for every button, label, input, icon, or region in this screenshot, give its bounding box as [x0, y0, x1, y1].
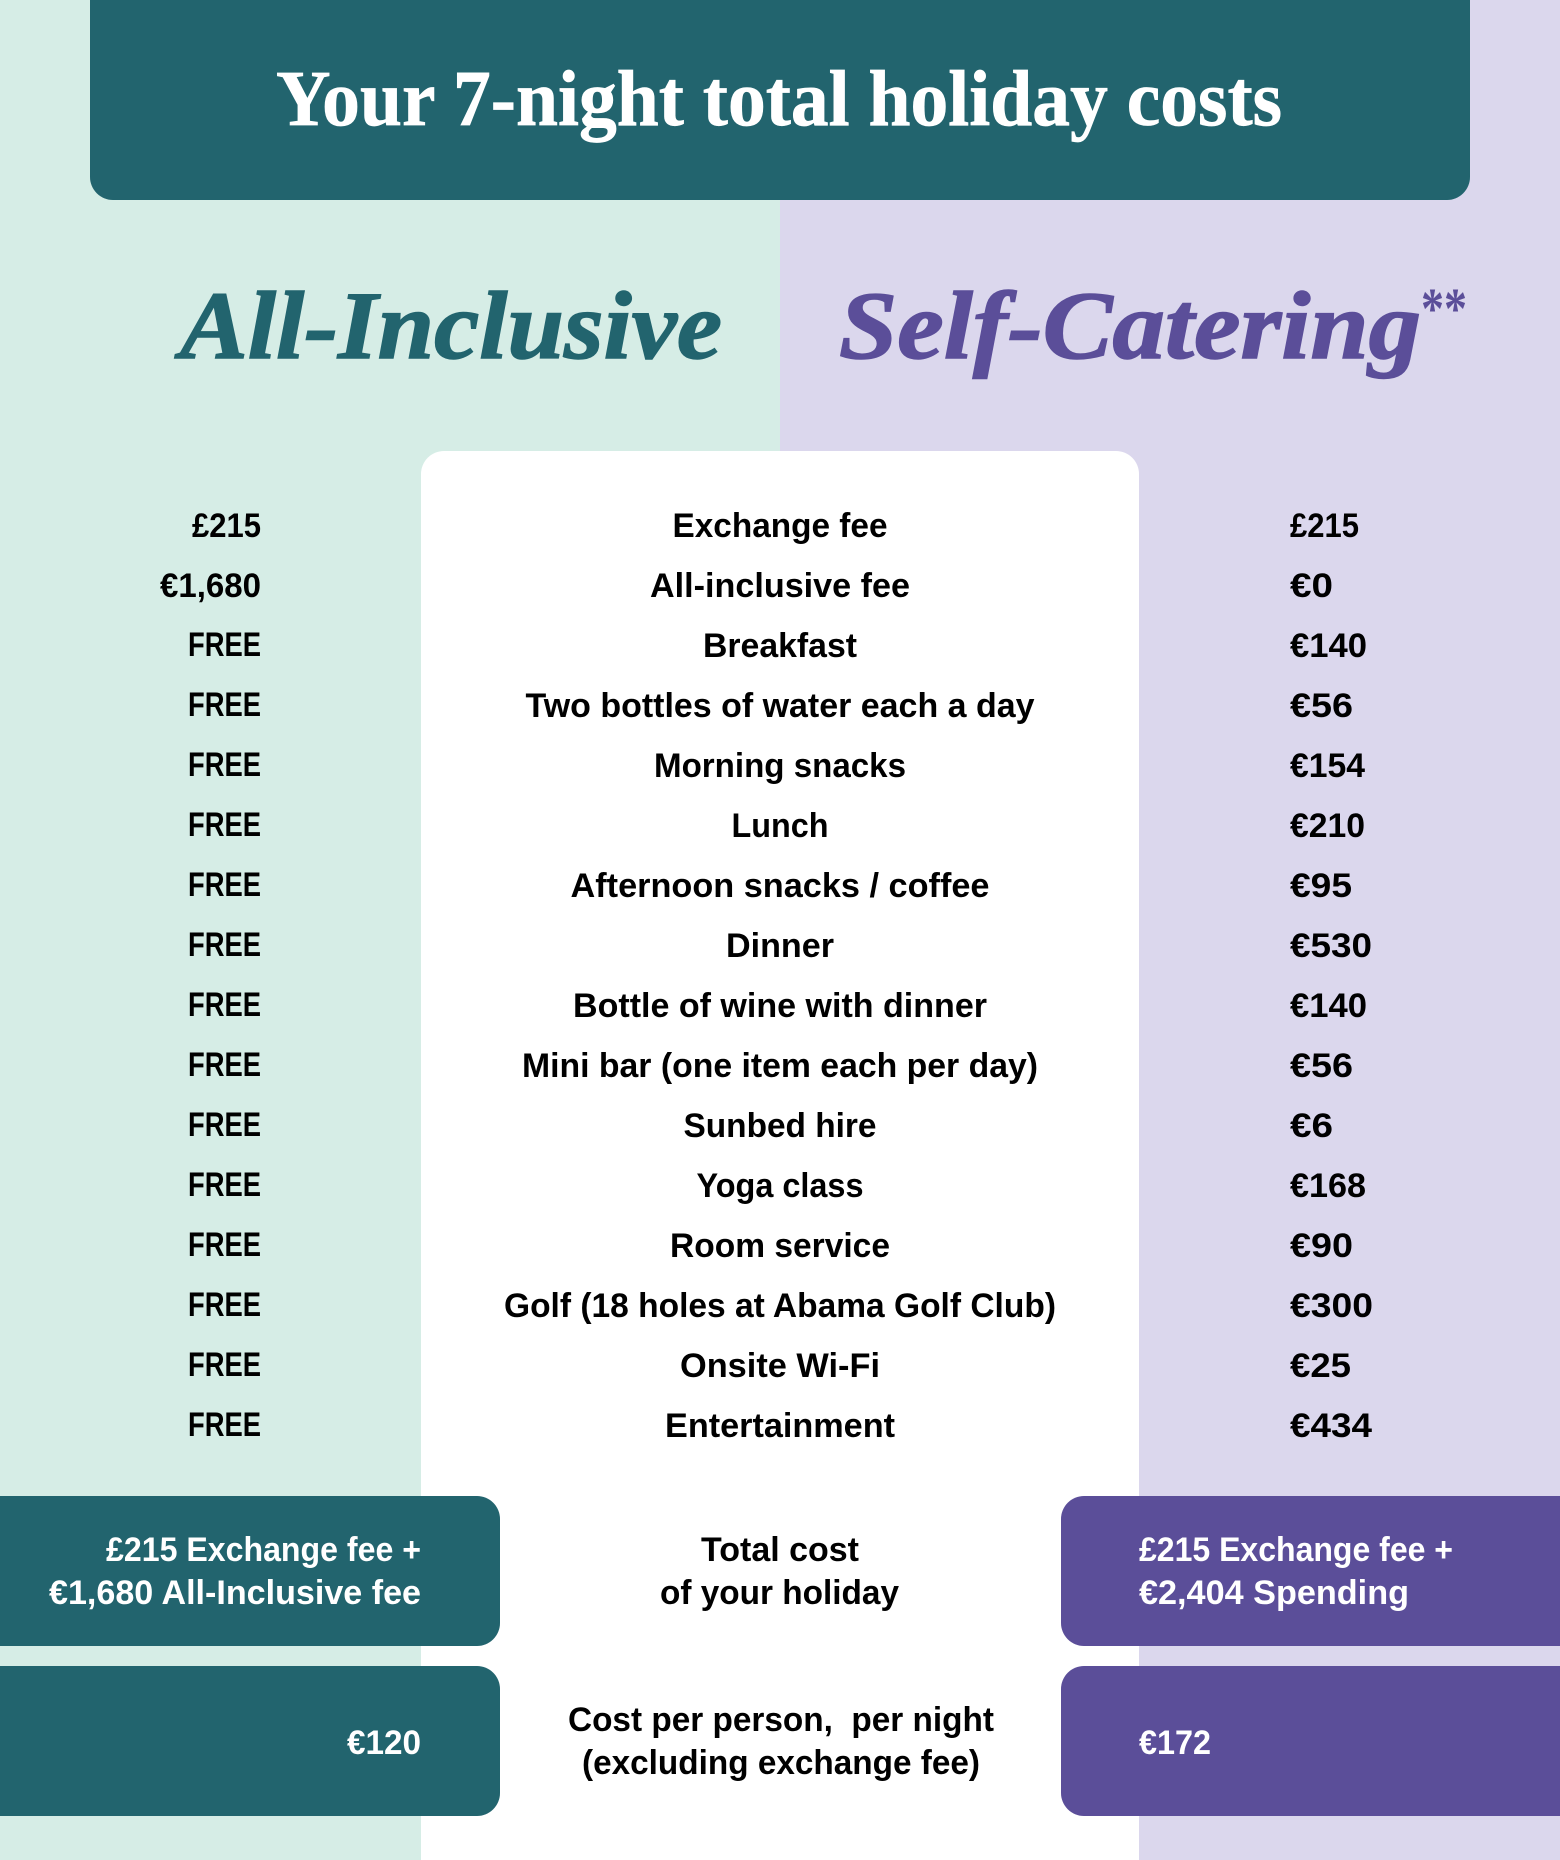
row: Onsite Wi-Fi: FREE	[188, 1346, 261, 1384]
label: cost per person per night: Cost per person, per night	[568, 1701, 994, 1739]
row: Bottle of wine with dinner: €140	[1290, 987, 1367, 1025]
panel: white centre column	[421, 451, 1139, 1860]
row: All-inclusive fee	[160, 567, 1333, 605]
per-night box: Self-Catering	[1061, 1666, 1560, 1816]
total box: Self-Catering: £215 Exchange fee +	[1139, 1531, 1453, 1569]
row: Golf: FREE	[188, 1286, 261, 1324]
row: Room service: €90	[1290, 1227, 1353, 1265]
row: Morning snacks: FREE	[188, 746, 261, 784]
row: Two bottles of water each a day: €56	[1290, 687, 1353, 725]
row: Two bottles of water each a day: FREE	[188, 686, 261, 724]
row: Exchange fee: Exchange fee	[672, 507, 888, 545]
heading: Self-Catering: Self-Catering	[839, 272, 1421, 379]
title banner: Your 7-night total holiday costs	[276, 56, 1282, 143]
per-night box: Self-Catering: €172	[1139, 1724, 1211, 1762]
row: All-inclusive fee: €1,680	[160, 567, 261, 605]
row: Afternoon snacks / coffee: Afternoon snacks / coffee	[570, 867, 990, 905]
row: Sunbed hire: Sunbed hire	[684, 1107, 876, 1145]
row: Onsite Wi-Fi: €25	[1290, 1347, 1351, 1385]
row: Morning snacks	[188, 746, 1365, 785]
row: Yoga class: Yoga class	[696, 1167, 864, 1205]
row: Entertainment: €434	[1290, 1407, 1372, 1445]
row: Room service: Room service	[670, 1227, 890, 1265]
row: Dinner	[188, 926, 1372, 965]
cost table	[160, 507, 1373, 1445]
total box: All-Inclusive: £215 Exchange fee +	[106, 1531, 421, 1569]
row: Lunch: Lunch	[732, 807, 828, 845]
row: Bottle of wine with dinner: Bottle of wine with dinner	[573, 987, 987, 1025]
total box: Self-Catering: €2,404 Spending	[1139, 1574, 1409, 1612]
row: Yoga class: FREE	[188, 1166, 261, 1204]
row: Golf: Golf (18 holes at Abama Golf Club)	[504, 1287, 1056, 1325]
row: Mini bar: €56	[1290, 1047, 1353, 1085]
row: Entertainment: Entertainment	[665, 1407, 895, 1445]
per-night box: All-Inclusive	[0, 1666, 500, 1816]
row: Exchange fee: £215	[1290, 507, 1359, 545]
row: Morning snacks: €154	[1290, 747, 1365, 785]
row: Dinner: €530	[1290, 927, 1372, 965]
row: Exchange fee: £215	[192, 507, 261, 545]
row: Dinner: FREE	[188, 926, 261, 964]
total box: All-Inclusive	[0, 1496, 500, 1646]
label: cost per person per night: (excluding exchange fee)	[582, 1744, 980, 1782]
row: Breakfast: €140	[1290, 627, 1367, 665]
row: Sunbed hire: FREE	[188, 1106, 261, 1144]
row: Lunch: FREE	[188, 806, 261, 844]
row: Exchange fee	[192, 507, 1359, 545]
heading: Self-Catering: **	[1421, 276, 1467, 341]
row: Breakfast	[188, 626, 1367, 665]
row: Dinner: Dinner	[726, 927, 834, 965]
total box: Self-Catering	[1061, 1496, 1560, 1646]
label: cost per person per night	[568, 1701, 994, 1782]
row: Mini bar	[188, 1046, 1353, 1085]
row: Breakfast: FREE	[188, 626, 261, 664]
row: Bottle of wine with dinner	[188, 986, 1367, 1025]
row: Room service	[188, 1226, 1353, 1265]
label: total cost	[660, 1531, 899, 1612]
row: Morning snacks: Morning snacks	[654, 747, 906, 785]
row: Golf	[188, 1286, 1373, 1325]
row: Lunch	[188, 806, 1365, 845]
row: Room service: FREE	[188, 1226, 261, 1264]
per-night box: All-Inclusive: €120	[347, 1724, 421, 1762]
row: Onsite Wi-Fi: Onsite Wi-Fi	[680, 1347, 880, 1385]
row: Afternoon snacks / coffee: €95	[1290, 867, 1352, 905]
row: Yoga class: €168	[1290, 1167, 1366, 1205]
total box: All-Inclusive: €1,680 All-Inclusive fee	[49, 1574, 421, 1612]
row: Mini bar: Mini bar (one item each per day)	[522, 1047, 1038, 1085]
row: Entertainment: FREE	[188, 1406, 261, 1444]
row: Mini bar: FREE	[188, 1046, 261, 1084]
heading: All-Inclusive: All-Inclusive	[175, 272, 722, 379]
row: Bottle of wine with dinner: FREE	[188, 986, 261, 1024]
row: All-inclusive fee: All-inclusive fee	[650, 567, 910, 605]
row: Yoga class	[188, 1166, 1366, 1205]
row: Afternoon snacks / coffee: FREE	[188, 866, 261, 904]
row: Lunch: €210	[1290, 807, 1365, 845]
row: Golf: €300	[1290, 1287, 1373, 1325]
label: total cost: Total cost	[701, 1531, 859, 1569]
row: Two bottles of water each a day: Two bottles of water each a day	[526, 687, 1035, 725]
title banner	[90, 0, 1470, 200]
row: Two bottles of water each a day	[188, 686, 1353, 725]
label: total cost: of your holiday	[660, 1574, 899, 1612]
row: Onsite Wi-Fi	[188, 1346, 1351, 1385]
row: Entertainment	[188, 1406, 1372, 1445]
row: Sunbed hire	[188, 1106, 1333, 1145]
row: Breakfast: Breakfast	[703, 627, 857, 665]
row: All-inclusive fee: €0	[1290, 567, 1333, 605]
row: Sunbed hire: €6	[1290, 1107, 1333, 1145]
row: Afternoon snacks / coffee	[188, 866, 1352, 905]
